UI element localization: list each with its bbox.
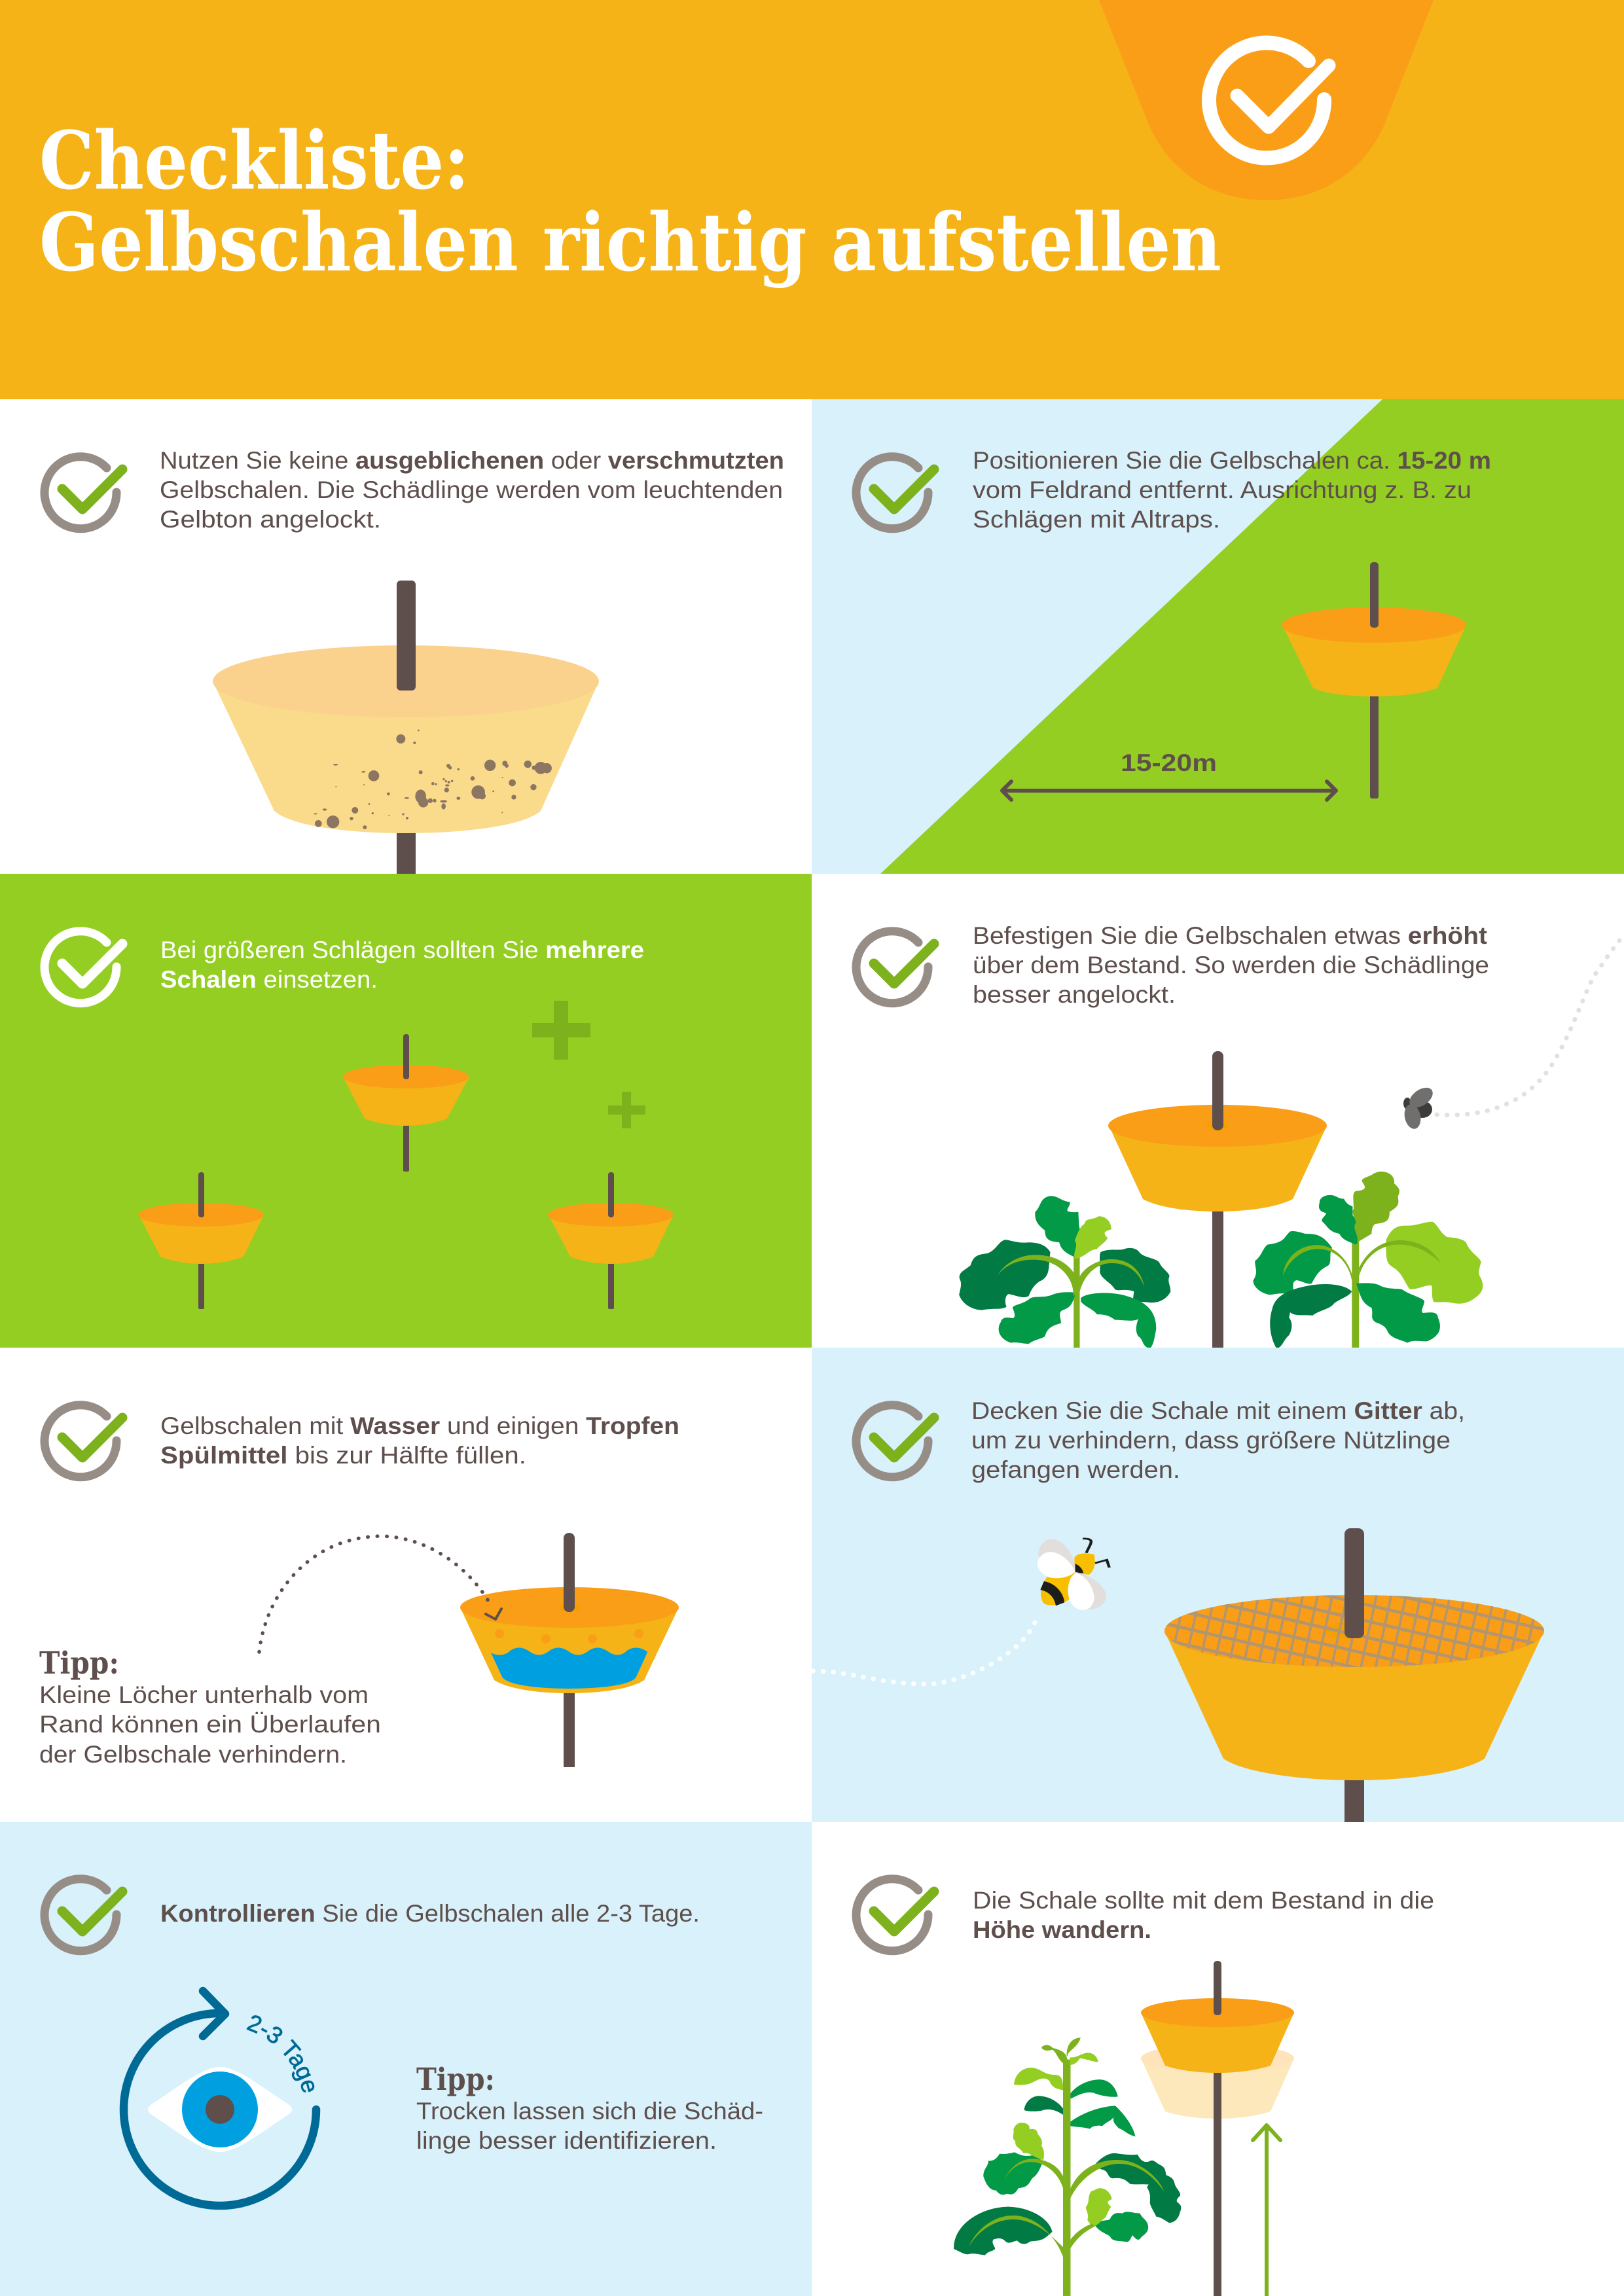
- text: Die Schale sollte mit dem Bestand in die: [973, 1887, 1434, 1914]
- text: Positionieren Sie die Gelbschalen ca. 15-20 m: [973, 447, 1491, 474]
- panel 3: several bowls: [0, 874, 812, 1348]
- text: Höhe wandern.: [973, 1916, 1151, 1943]
- text: [973, 922, 1489, 1008]
- check icon: [45, 1879, 122, 1951]
- text: um zu verhindern, dass größere Nützlinge: [971, 1427, 1451, 1454]
- text: Schlägen mit Altraps.: [973, 506, 1220, 533]
- plus big: [532, 1001, 590, 1060]
- panel 4: raised above crop: [812, 874, 1624, 1348]
- text: Befestigen Sie die Gelbschalen etwas erhöht: [973, 922, 1487, 949]
- eye with cycle arrow: 2-3 Tage: [246, 2015, 314, 2093]
- tip: Trocken lassen sich die Schäd-: [416, 2098, 763, 2125]
- panel 8: bowl rises with crop: [812, 1822, 1624, 2296]
- tip: linge besser identifizieren.: [416, 2127, 717, 2154]
- text: [973, 447, 1491, 533]
- text: [160, 447, 784, 533]
- text: [160, 1412, 679, 1469]
- text: Schalen einsetzen.: [160, 966, 378, 993]
- bowl: [1282, 562, 1466, 798]
- panel 2: distance from field edge: [812, 399, 1624, 874]
- title: [39, 113, 1221, 289]
- bowl: [1108, 1051, 1327, 1348]
- growth arrow: [1253, 2125, 1280, 2296]
- text: vom Feldrand entfernt. Ausrichtung z. B. zu: [973, 476, 1471, 503]
- text: Spülmittel bis zur Hälfte füllen.: [160, 1442, 526, 1469]
- dirt spots: [314, 730, 552, 829]
- text: [160, 937, 644, 993]
- check icon: [856, 931, 934, 1003]
- panel 6: mesh cover: [812, 1348, 1624, 1822]
- bowl left: [138, 1172, 264, 1309]
- eye with cycle arrow: [119, 1987, 321, 2210]
- panel 7: inspect every 2-3 days: [0, 1822, 812, 2296]
- fly: [1402, 1084, 1436, 1130]
- holes: [495, 1629, 643, 1643]
- bowl with water: [460, 1533, 679, 1767]
- text: gefangen werden.: [971, 1456, 1180, 1483]
- distance arrow: [1002, 749, 1336, 800]
- water: [491, 1647, 647, 1689]
- check icon: [45, 457, 122, 529]
- check icon: [45, 1405, 122, 1477]
- check icon: [856, 457, 934, 529]
- text: Gelbschalen. Die Schädlinge werden vom leuchtenden: [160, 476, 783, 503]
- panel 5: water and detergent: [0, 1348, 812, 1822]
- panel 1: faded and dirty bowls: [0, 399, 812, 874]
- text: Gelbschalen mit Wasser und einigen Tropfen: [160, 1412, 679, 1439]
- text: [971, 1397, 1465, 1483]
- bee trail: [813, 1615, 1038, 1684]
- text: Decken Sie die Schale mit einem Gitter ab,: [971, 1397, 1465, 1424]
- tip: [416, 2062, 763, 2154]
- tip: Rand können ein Überlaufen: [39, 1711, 381, 1738]
- bee: [1038, 1539, 1110, 1610]
- tip: Tipp:: [416, 2062, 495, 2098]
- tip: der Gelbschale verhindern.: [39, 1741, 347, 1768]
- fly trail: [1437, 937, 1622, 1115]
- faded bowl with dirt: [213, 581, 599, 874]
- header tab with check icon: [1099, 0, 1434, 200]
- bowl right: [548, 1172, 674, 1309]
- faded lower bowl: [1141, 2044, 1294, 2119]
- tip: Tipp:: [39, 1645, 119, 1681]
- title: Checkliste:: [39, 113, 469, 207]
- text: Gelbton angelockt.: [160, 506, 381, 533]
- stick and bowl: [1141, 1961, 1294, 2296]
- text: über dem Bestand. So werden die Schädlinge: [973, 952, 1489, 978]
- bowl with mesh: [1164, 1528, 1544, 1822]
- distance arrow: 15-20m: [1121, 749, 1217, 776]
- tip: [39, 1645, 381, 1768]
- check icon: [856, 1405, 934, 1477]
- panel: header: [0, 0, 1624, 399]
- dotted arrow: [259, 1536, 501, 1652]
- text: Kontrollieren Sie die Gelbschalen alle 2-3 Tage.: [160, 1900, 700, 1927]
- check icon white: [45, 931, 122, 1003]
- bowl middle: [343, 1034, 469, 1172]
- text: Nutzen Sie keine ausgeblichenen oder verschmutzten: [160, 447, 784, 474]
- text: Bei größeren Schlägen sollten Sie mehrere: [160, 937, 644, 963]
- text: [973, 1887, 1434, 1943]
- tip: Kleine Löcher unterhalb vom: [39, 1681, 369, 1708]
- plant: [954, 2037, 1181, 2296]
- plus small: [608, 1092, 645, 1128]
- text: besser angelockt.: [973, 981, 1176, 1008]
- check icon: [856, 1879, 934, 1951]
- plants: [959, 1172, 1483, 1348]
- title: Gelbschalen richtig aufstellen: [39, 195, 1221, 289]
